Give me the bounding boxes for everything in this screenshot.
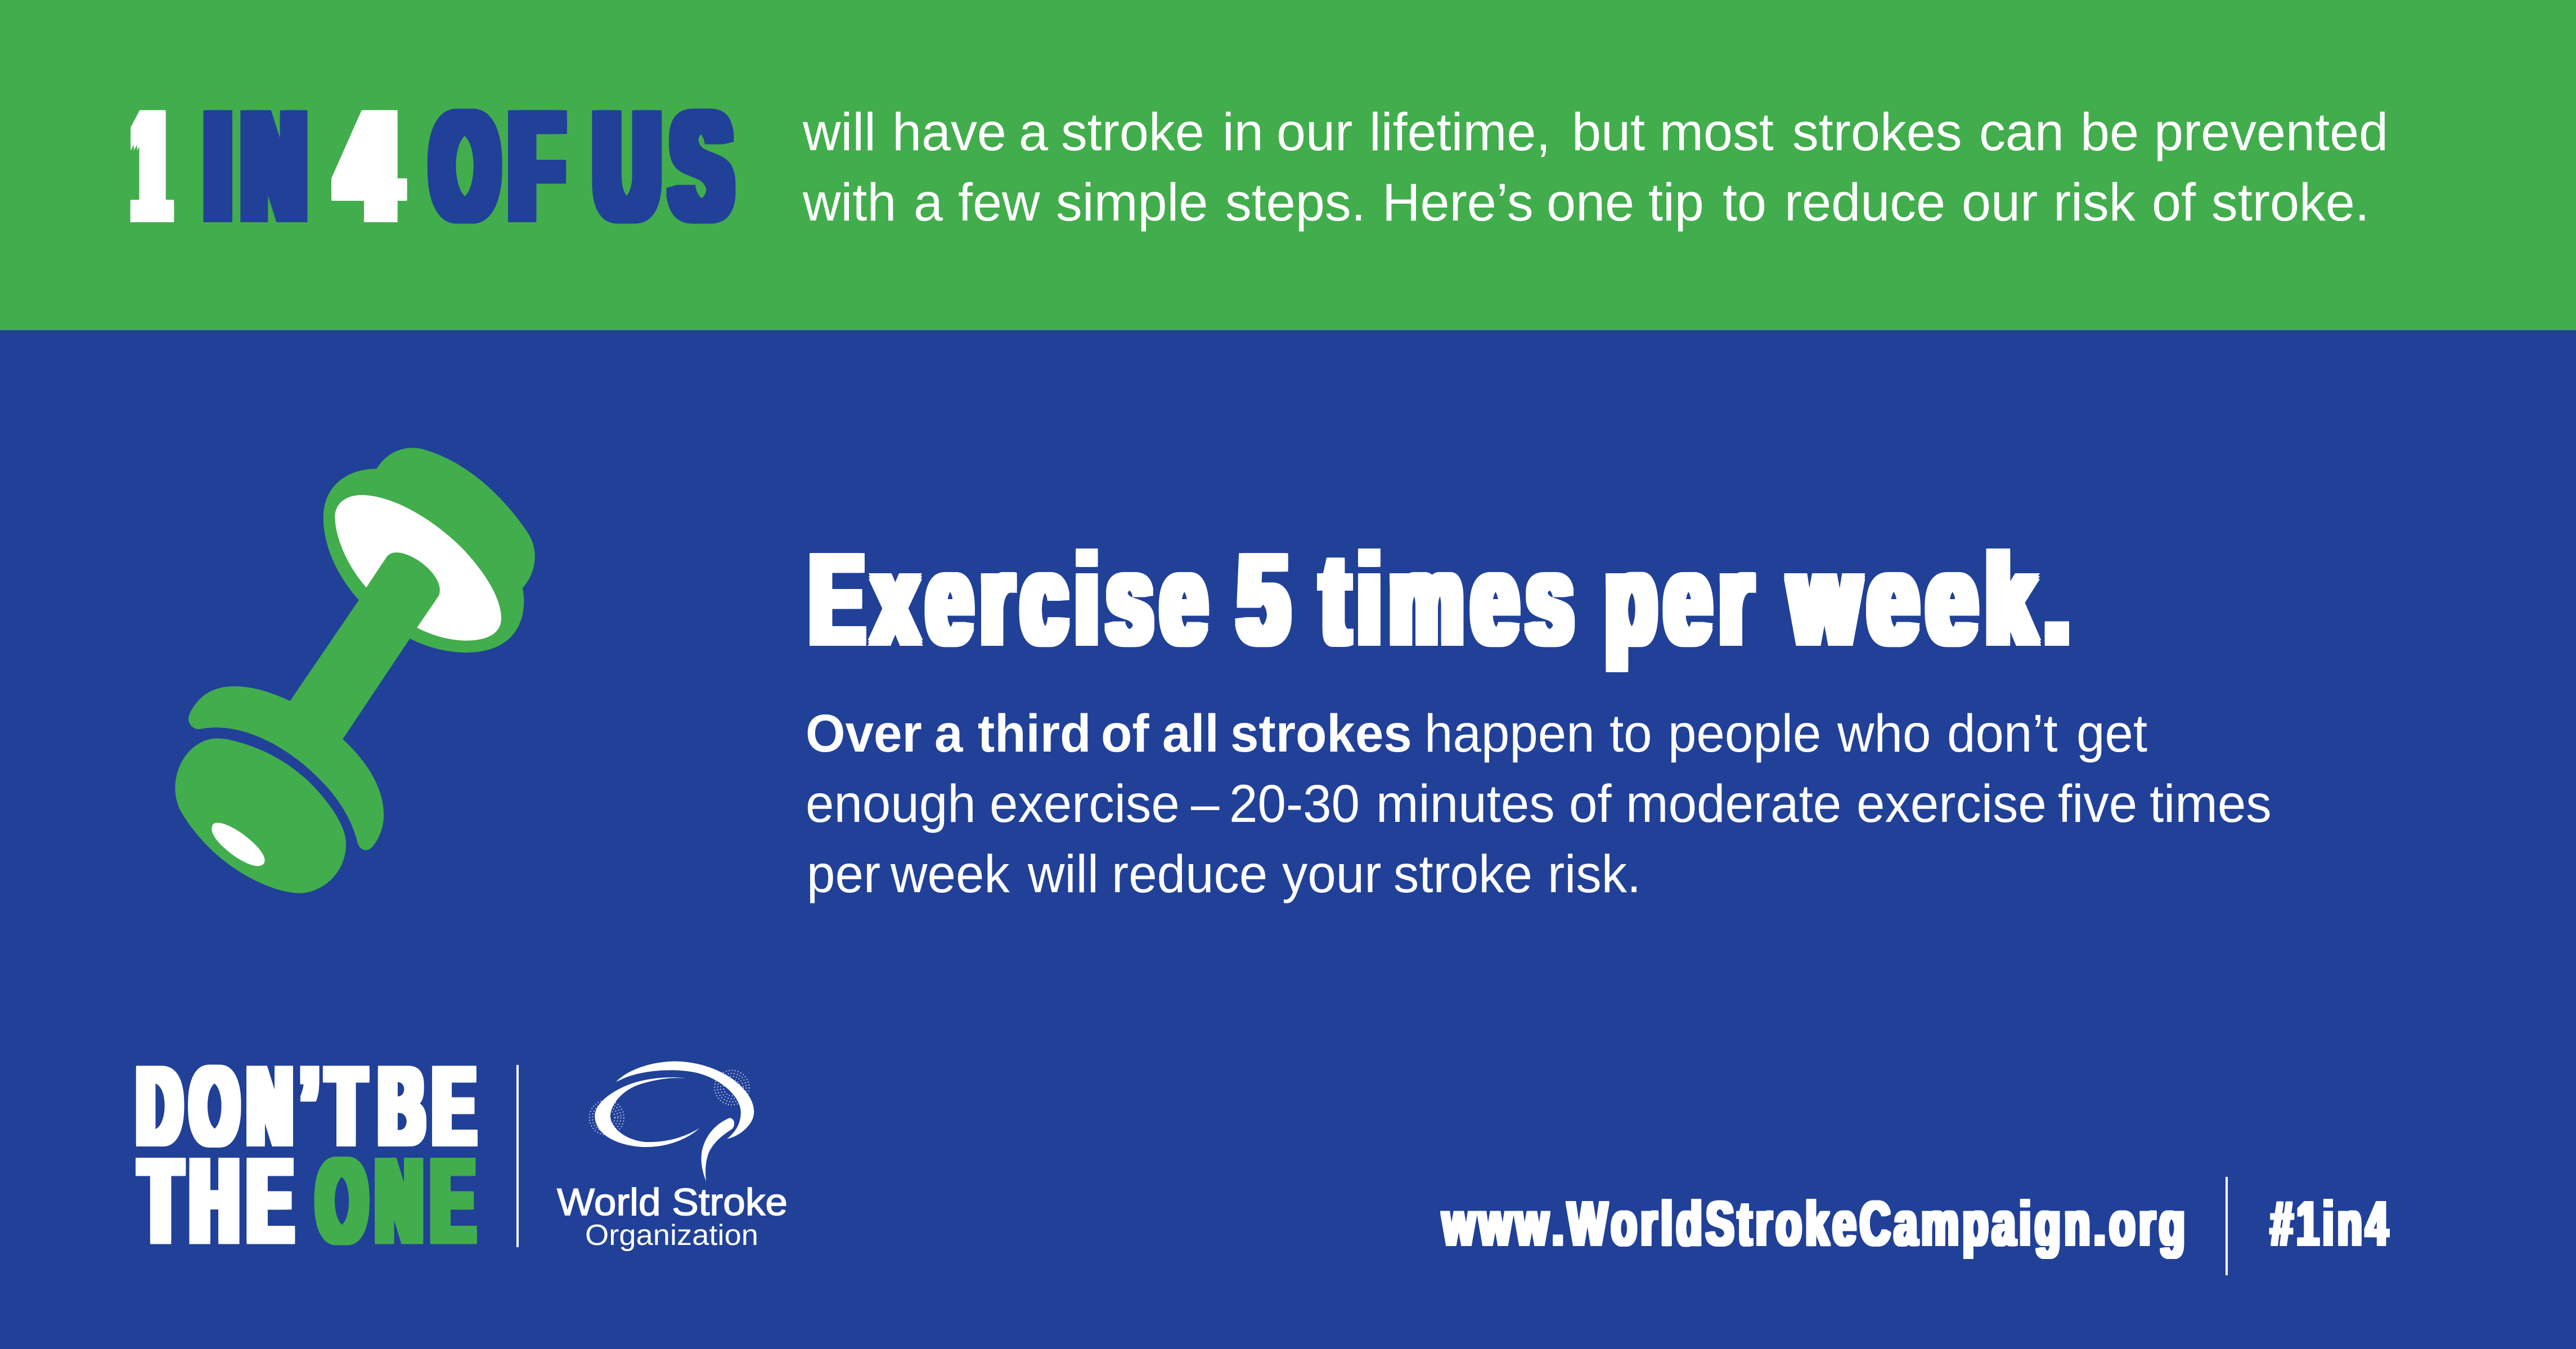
heading: exercise 5 times per week: per [1606,528,1761,669]
text block: exercise explanation: will [1027,844,1113,903]
text block: exercise explanation: five [2058,774,2151,833]
text block: header statement: of [2152,172,2210,232]
text block: header statement: can [1979,102,2079,161]
text: hashtag: #1in4 [2271,1189,2391,1258]
text block: exercise explanation: enough [806,774,990,833]
text block: exercise explanation: Over [806,703,936,763]
text block: header statement: Here’s [1382,172,1548,232]
text block: exercise explanation: who [1837,703,1945,763]
text block: header statement: stroke [1061,102,1219,161]
text block: header statement: steps. [1225,172,1381,232]
text block: header statement: simple [1056,172,1222,232]
text block: header statement: a [1019,102,1063,161]
text block: header statement: to [1723,172,1781,232]
panel: blue main area [0,330,2576,1349]
text block: header statement: have [892,102,1021,161]
text block: exercise explanation: stroke [1393,844,1547,903]
text block: exercise explanation: risk. [1548,844,1641,903]
text block: exercise explanation: reduce [1112,844,1282,903]
text: campaign website: www.WorldStrokeCampaign.org [1442,1189,2188,1258]
text block: header statement: be [2080,102,2154,161]
heading: exercise 5 times per week [810,528,2079,672]
text block: header statement: most [1660,102,1788,161]
text block: header statement: with [802,172,911,232]
text block: exercise explanation: third [978,703,1105,763]
text block: header statement: our [1276,102,1367,161]
logo: don't be the one [136,1044,484,1267]
panel: green header band [0,0,2576,330]
divider: logo separator [516,1065,519,1247]
logo: don't be the one: ONE [317,1135,483,1267]
heading: 1 in 4 of us: 1 [137,80,166,251]
text block: header statement [802,102,2388,232]
text block: header statement: tip [1648,172,1719,232]
heading: 1 in 4 of us: OF [432,80,575,251]
heading: exercise 5 times per week: Exercise [810,528,1215,669]
heading: 1 in 4 of us: IN [206,80,318,251]
logo: don't be the one: BE [379,1044,484,1168]
text block: exercise explanation: – [1191,774,1234,833]
text block: exercise explanation: per [807,844,894,903]
text block: exercise explanation: a [934,703,977,763]
divider: footer separator [2226,1177,2228,1275]
text block: header statement: lifetime, [1369,102,1565,161]
text block: header statement: in [1222,102,1278,161]
text block: exercise explanation: week [890,844,1024,903]
text block: header statement: our [1962,172,2052,232]
logo: don't be the one: DON’T [137,1044,374,1168]
text block: exercise explanation: exercise [1856,774,2061,833]
text block: exercise explanation: times [2150,774,2272,833]
text block: exercise explanation: get [2076,703,2147,763]
text block: header statement: a [914,172,957,232]
text block: exercise explanation: happen [1424,703,1609,763]
heading: exercise 5 times per week: 5 [1238,528,1288,669]
text block: exercise explanation: to [1610,703,1666,763]
heading: exercise 5 times per week: times [1321,528,1581,669]
text block: header statement: one [1547,172,1649,232]
logo: world stroke organization: World Stroke [557,1181,788,1224]
text block: exercise explanation: don’t [1947,703,2072,763]
text block: exercise explanation: of [1569,774,1626,833]
text block: header statement: but [1572,102,1660,161]
text block: header statement: stroke. [2211,172,2370,232]
logo: world stroke organization: Organization [585,1219,758,1252]
text block: header statement: risk [2053,172,2150,232]
heading: 1 in 4 of us: 4 [340,80,398,251]
heading: 1 in 4 of us: US [595,80,744,251]
text block: exercise explanation: of [1101,703,1163,763]
text block: exercise explanation: moderate [1626,774,1855,833]
text block: header statement: reduce [1784,172,1960,232]
logo: don't be the one: THE [141,1135,302,1267]
heading: exercise 5 times per week: week. [1790,528,2079,669]
text block: exercise explanation: people [1668,703,1836,763]
text block: exercise explanation: exercise [990,774,1194,833]
text block: exercise explanation: strokes [1230,703,1412,763]
text block: header statement: prevented [2154,102,2388,161]
text block: header statement: few [958,172,1055,232]
text block: exercise explanation: your [1282,844,1396,903]
text block: exercise explanation: all [1162,703,1233,763]
text block: header statement: will [802,102,891,161]
text block: exercise explanation: minutes [1376,774,1569,833]
heading: 1 in 4 of us [131,80,744,251]
text block: header statement: strokes [1792,102,1977,161]
text block: exercise explanation: 20-30 [1229,774,1374,833]
